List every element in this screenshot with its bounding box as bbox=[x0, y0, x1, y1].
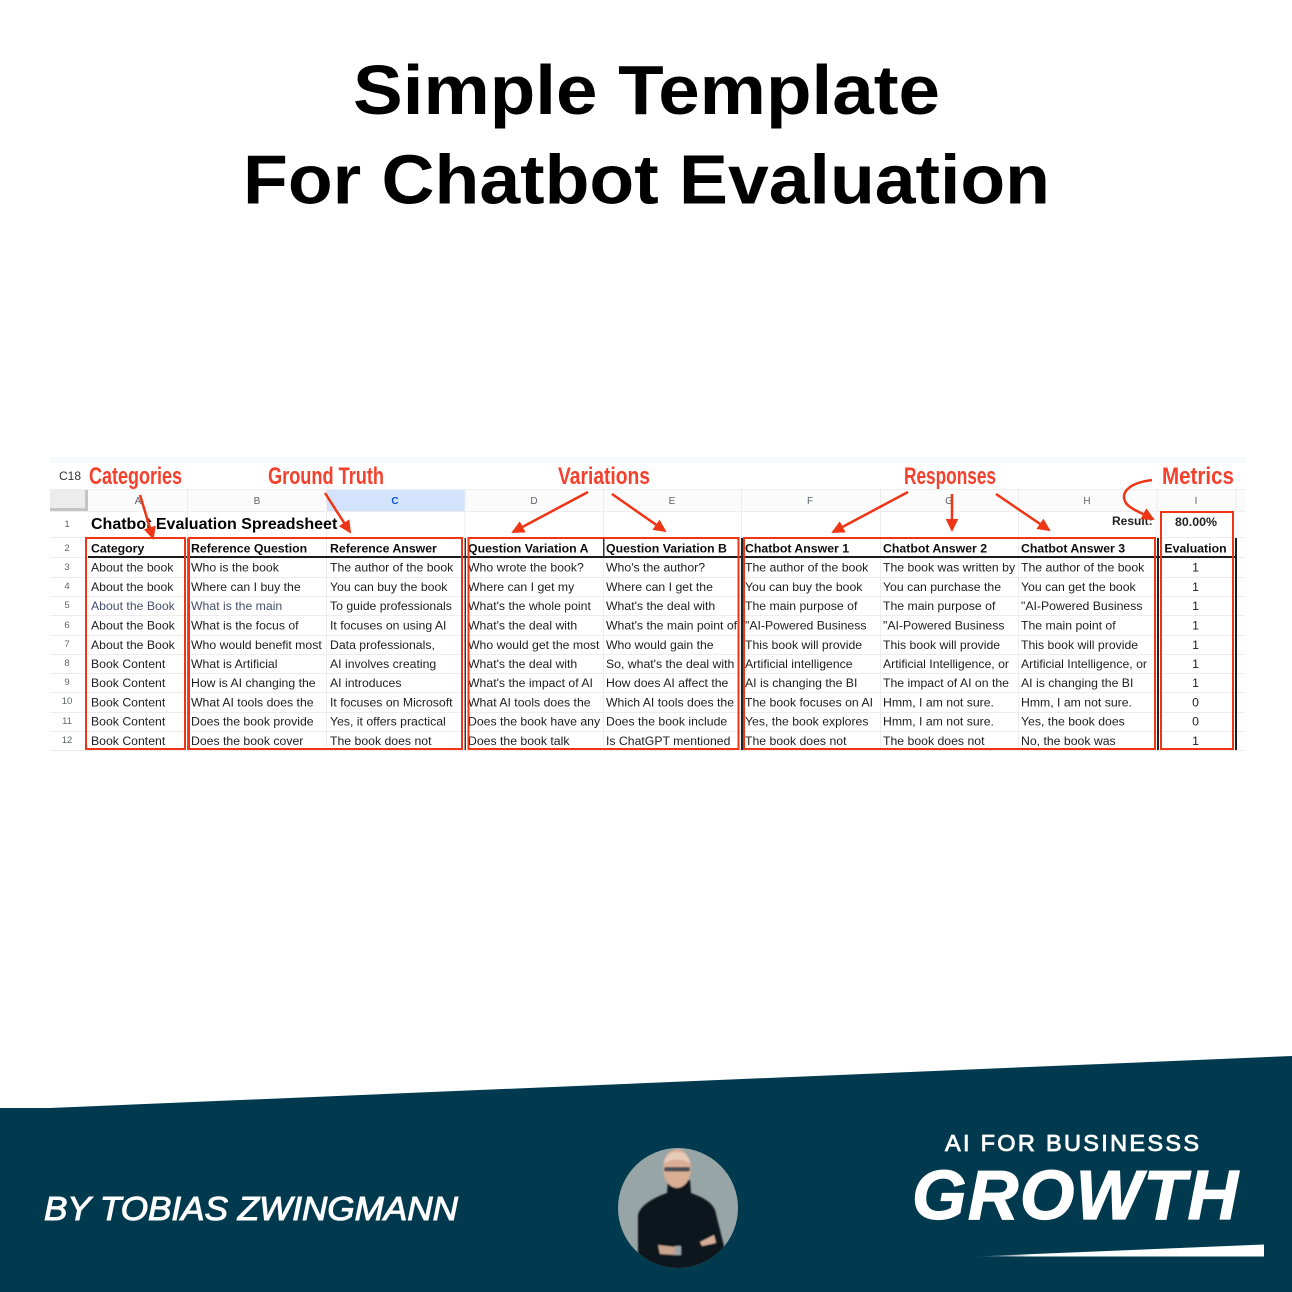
arrow: categories bbox=[140, 495, 153, 538]
column: reference answer: You can buy the book bbox=[330, 580, 448, 594]
column: evaluation: 0 bbox=[1192, 696, 1199, 710]
column: question variation A: What's the deal with bbox=[468, 657, 577, 671]
column: chatbot answer 1: The book focuses on AI bbox=[745, 696, 873, 710]
column: chatbot answer 1: AI is changing the BI bbox=[745, 676, 857, 690]
column: reference question: Who would benefit most bbox=[191, 638, 322, 652]
column: chatbot answer 3: The author of the book bbox=[1021, 560, 1145, 574]
column letters: H bbox=[1083, 496, 1091, 507]
header row: Evaluation bbox=[1164, 542, 1227, 556]
column letters: A bbox=[135, 496, 142, 507]
header row: Chatbot Answer 2 bbox=[883, 542, 987, 556]
column: chatbot answer 1: The main purpose of bbox=[745, 599, 858, 613]
row numbers: 9 bbox=[64, 677, 70, 688]
column: chatbot answer 1: You can buy the book bbox=[745, 580, 863, 594]
column: question variation B bbox=[606, 560, 738, 748]
column: reference question: Does the book provide bbox=[191, 714, 314, 728]
column: reference question: What is the focus of bbox=[191, 618, 299, 632]
label: categories: Categories bbox=[89, 463, 182, 490]
column: category: About the Book bbox=[91, 599, 176, 613]
row numbers: 4 bbox=[64, 581, 70, 592]
spreadsheet title: Chatbot Evaluation Spreadsheet bbox=[91, 516, 338, 533]
column: chatbot answer 2: The main purpose of bbox=[883, 599, 996, 613]
column: chatbot answer 2: The book does not bbox=[883, 734, 985, 748]
column: reference question: What is the main bbox=[191, 599, 282, 613]
arrow: variation A bbox=[513, 492, 588, 532]
column: chatbot answer 3: You can get the book bbox=[1021, 580, 1137, 594]
column: chatbot answer 2: "AI-Powered Business bbox=[883, 618, 1004, 632]
column: question variation A: Who wrote the book? bbox=[468, 560, 584, 574]
column: reference question: What is Artificial bbox=[191, 657, 277, 671]
red highlight boxes bbox=[86, 512, 1233, 749]
header row: Question Variation B bbox=[606, 542, 727, 556]
column: reference answer: Yes, it offers practical bbox=[330, 714, 446, 728]
row numbers bbox=[62, 519, 72, 746]
column: evaluation: 1 bbox=[1192, 657, 1199, 671]
column: evaluation: 0 bbox=[1192, 714, 1199, 728]
column letters: D bbox=[530, 496, 538, 507]
column: chatbot answer 3: "AI-Powered Business bbox=[1021, 599, 1142, 613]
row numbers: 1 bbox=[64, 519, 70, 530]
column: question variation B: Does the book include bbox=[606, 714, 727, 728]
column letters: C bbox=[391, 496, 399, 507]
column: chatbot answer 2: This book will provide bbox=[883, 638, 1000, 652]
column letters: I bbox=[1195, 496, 1197, 507]
column: reference question: How is AI changing the bbox=[191, 676, 316, 690]
column letters bbox=[135, 496, 1197, 507]
column: chatbot answer 2: The book was written by bbox=[883, 560, 1016, 574]
label: responses: Responses bbox=[904, 463, 996, 490]
arrow: response 2 bbox=[951, 494, 953, 530]
column: chatbot answer 3: Yes, the book does bbox=[1021, 714, 1125, 728]
header row: Category bbox=[91, 542, 144, 556]
row numbers: 10 bbox=[62, 696, 72, 707]
column: question variation B: Is ChatGPT mentioned bbox=[606, 734, 731, 748]
header row: Question Variation A bbox=[468, 542, 589, 556]
portrait photo bbox=[618, 1148, 738, 1275]
column: question variation B: What's the deal with bbox=[606, 599, 715, 613]
column: category: Book Content bbox=[91, 676, 166, 690]
column: chatbot answer 2: Hmm, I am not sure. bbox=[883, 696, 994, 710]
label: metrics: Metrics bbox=[1162, 463, 1234, 490]
column: category: Book Content bbox=[91, 734, 166, 748]
column: category: About the Book bbox=[91, 638, 176, 652]
column: reference answer: It focuses on using AI bbox=[330, 618, 446, 632]
column: evaluation bbox=[1192, 560, 1199, 748]
cell reference: C18 bbox=[59, 469, 81, 483]
column: reference answer bbox=[330, 560, 454, 748]
row numbers: 7 bbox=[64, 639, 70, 650]
footer band bbox=[0, 1056, 1292, 1292]
row numbers: 2 bbox=[64, 543, 70, 554]
header row: Chatbot Answer 1 bbox=[745, 542, 849, 556]
logo: AI for business growth: GROWTH bbox=[912, 1156, 1239, 1234]
column: question variation B: What's the main point of bbox=[606, 618, 738, 632]
logo: AI for business growth: AI FOR BUSINESSS bbox=[945, 1130, 1199, 1156]
column: category: Book Content bbox=[91, 657, 166, 671]
heavy black borders bbox=[88, 538, 1237, 750]
column: reference answer: AI introduces bbox=[330, 676, 402, 690]
column: reference answer: AI involves creating bbox=[330, 657, 436, 671]
column: chatbot answer 3: Hmm, I am not sure. bbox=[1021, 696, 1132, 710]
column: category: About the Book bbox=[91, 618, 176, 632]
column: chatbot answer 1: Artificial intelligence bbox=[745, 657, 853, 671]
column: reference answer: To guide professionals bbox=[330, 599, 452, 613]
column: chatbot answer 1: This book will provide bbox=[745, 638, 862, 652]
column: chatbot answer 1: The book does not bbox=[745, 734, 847, 748]
column letters: B bbox=[254, 496, 261, 507]
column: chatbot answer 2: Hmm, I am not sure. bbox=[883, 714, 994, 728]
arrow: metrics bbox=[1124, 480, 1153, 519]
column: evaluation: 1 bbox=[1192, 580, 1199, 594]
column: evaluation: 1 bbox=[1192, 638, 1199, 652]
column: chatbot answer 1 bbox=[745, 560, 873, 748]
column: reference answer: The author of the book bbox=[330, 560, 454, 574]
row numbers: 5 bbox=[64, 600, 70, 611]
column: chatbot answer 1: Yes, the book explores bbox=[745, 714, 868, 728]
column: evaluation: 1 bbox=[1192, 560, 1199, 574]
column: reference question: Does the book cover bbox=[191, 734, 303, 748]
title: Simple Template bbox=[353, 51, 940, 129]
column: chatbot answer 3: No, the book was bbox=[1021, 734, 1116, 748]
title bbox=[243, 51, 1050, 218]
column letters: E bbox=[669, 496, 676, 507]
column: question variation B: Which AI tools does the bbox=[606, 696, 734, 710]
column: question variation B: Who would gain the bbox=[606, 638, 714, 652]
column: question variation B: Where can I get the bbox=[606, 580, 713, 594]
arrow: response 1 bbox=[833, 492, 908, 532]
column: evaluation: 1 bbox=[1192, 676, 1199, 690]
column: chatbot answer 3 bbox=[1021, 560, 1147, 748]
column: chatbot answer 2: You can purchase the bbox=[883, 580, 1001, 594]
column: question variation A: What AI tools does the bbox=[468, 696, 591, 710]
arrow: variation B bbox=[612, 494, 665, 531]
row numbers: 6 bbox=[64, 620, 70, 631]
column: reference answer: Data professionals, bbox=[330, 638, 435, 652]
column: question variation B: Who's the author? bbox=[606, 560, 705, 574]
result cell: 80.00% bbox=[1175, 515, 1217, 529]
column: reference question: Where can I buy the bbox=[191, 580, 301, 594]
header row bbox=[91, 542, 1227, 556]
result cell: Result: bbox=[1112, 514, 1153, 528]
column: reference answer: It focuses on Microsoft bbox=[330, 696, 453, 710]
result cell bbox=[1112, 514, 1217, 529]
column: category: About the book bbox=[91, 560, 174, 574]
column: question variation B: How does AI affect the bbox=[606, 676, 729, 690]
column: question variation A: Does the book have any bbox=[468, 714, 601, 728]
column: evaluation: 1 bbox=[1192, 734, 1199, 748]
row numbers: 3 bbox=[64, 562, 70, 573]
column header bar bbox=[50, 489, 1245, 512]
column: category: Book Content bbox=[91, 696, 166, 710]
column: reference answer: The book does not bbox=[330, 734, 432, 748]
column: chatbot answer 2: Artificial Intelligence, or bbox=[883, 657, 1009, 671]
header row: Chatbot Answer 3 bbox=[1021, 542, 1125, 556]
column: reference question: What AI tools does the bbox=[191, 696, 314, 710]
header row: Reference Question bbox=[191, 542, 307, 556]
grid lines bbox=[50, 489, 1245, 750]
row numbers: 11 bbox=[62, 716, 72, 727]
column: chatbot answer 3: The main point of bbox=[1021, 618, 1116, 632]
label: variations: Variations bbox=[558, 463, 650, 490]
row numbers: 8 bbox=[64, 658, 70, 669]
arrow: response 3 bbox=[996, 494, 1049, 530]
column: evaluation: 1 bbox=[1192, 599, 1199, 613]
column: category: Book Content bbox=[91, 714, 166, 728]
column: chatbot answer 3: Artificial Intelligence, or bbox=[1021, 657, 1147, 671]
column: chatbot answer 3: AI is changing the BI bbox=[1021, 676, 1133, 690]
header row: Reference Answer bbox=[330, 542, 437, 556]
row numbers: 12 bbox=[62, 735, 72, 746]
column: category bbox=[91, 560, 176, 748]
column: chatbot answer 1: The author of the book bbox=[745, 560, 869, 574]
column: question variation A: What's the impact of AI bbox=[468, 676, 593, 690]
column: chatbot answer 2 bbox=[883, 560, 1016, 748]
column: reference question: Who is the book bbox=[191, 560, 280, 574]
column: question variation A: What's the whole point bbox=[468, 599, 591, 613]
logo: AI for business growth bbox=[912, 1130, 1264, 1256]
column: question variation A: What's the deal with bbox=[468, 618, 577, 632]
title: For Chatbot Evaluation bbox=[243, 140, 1050, 218]
author credit: BY TOBIAS ZWINGMANN bbox=[44, 1191, 459, 1228]
panel: spreadsheet bbox=[50, 457, 1245, 752]
arrow: ground truth bbox=[325, 493, 350, 532]
column: category: About the book bbox=[91, 580, 174, 594]
column: evaluation: 1 bbox=[1192, 618, 1199, 632]
column: chatbot answer 2: The impact of AI on the bbox=[883, 676, 1009, 690]
column: question variation A bbox=[468, 560, 601, 748]
column: chatbot answer 1: "AI-Powered Business bbox=[745, 618, 866, 632]
column letters: G bbox=[945, 496, 953, 507]
column: chatbot answer 3: This book will provide bbox=[1021, 638, 1138, 652]
column: question variation B: So, what's the deal with bbox=[606, 657, 735, 671]
column: question variation A: Who would get the most bbox=[468, 638, 600, 652]
label: ground truth: Ground Truth bbox=[268, 463, 384, 490]
column: question variation A: Where can I get my bbox=[468, 580, 575, 594]
column: reference question bbox=[191, 560, 322, 748]
column: question variation A: Does the book talk bbox=[468, 734, 570, 748]
column letters: F bbox=[807, 496, 813, 507]
